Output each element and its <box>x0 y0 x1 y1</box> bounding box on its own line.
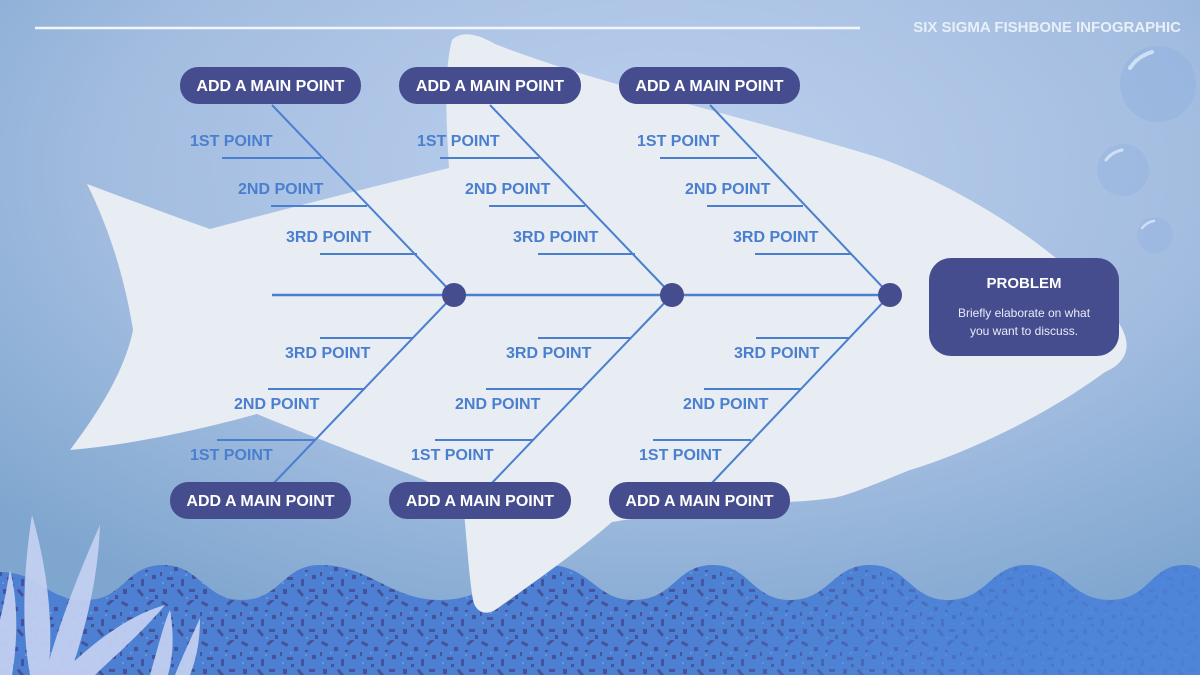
bone group 1 <box>217 105 454 485</box>
main point pills bottom <box>170 482 790 519</box>
sub-point labels: 1ST POINT <box>411 447 494 464</box>
main point pills bottom: ADD A MAIN POINT <box>186 493 335 510</box>
sub-point labels: 2ND POINT <box>455 396 541 413</box>
bubbles <box>1097 46 1196 253</box>
problem box: Briefly elaborate on what <box>958 306 1091 320</box>
sub-point labels: 1ST POINT <box>417 133 500 150</box>
problem box: PROBLEM <box>986 275 1062 292</box>
plant <box>0 515 200 675</box>
sub-point labels: 1ST POINT <box>190 447 273 464</box>
header line <box>35 27 860 29</box>
sub-point labels: 3RD POINT <box>733 229 819 246</box>
sub-point labels: 3RD POINT <box>506 345 592 362</box>
sub-point labels: 1ST POINT <box>190 133 273 150</box>
sub-point labels: 1ST POINT <box>637 133 720 150</box>
sub-point labels: 1ST POINT <box>639 447 722 464</box>
main point pills top: ADD A MAIN POINT <box>416 78 564 95</box>
sub-point labels: 2ND POINT <box>234 396 320 413</box>
main point pills top <box>180 67 800 104</box>
sub-point labels: 3RD POINT <box>286 229 372 246</box>
title: SIX SIGMA FISHBONE INFOGRAPHIC <box>913 19 1181 36</box>
main point pills top: ADD A MAIN POINT <box>196 78 345 95</box>
main point pills top: ADD A MAIN POINT <box>635 78 784 95</box>
bone group 3 <box>653 105 890 485</box>
wave <box>0 565 1200 675</box>
sub-point labels: 2ND POINT <box>683 396 769 413</box>
sub-point labels: 2ND POINT <box>238 181 324 198</box>
sub-point labels: 2ND POINT <box>465 181 551 198</box>
problem box: you want to discuss. <box>970 324 1078 338</box>
joints <box>442 283 902 307</box>
sub-point labels: 2ND POINT <box>685 181 771 198</box>
sub-point labels: 3RD POINT <box>285 345 371 362</box>
sub-point labels: 3RD POINT <box>513 229 599 246</box>
main point pills bottom: ADD A MAIN POINT <box>625 493 774 510</box>
sub-point labels: 3RD POINT <box>734 345 820 362</box>
main point pills bottom: ADD A MAIN POINT <box>406 493 554 510</box>
spine <box>272 294 890 296</box>
bone group 2 <box>435 105 672 485</box>
sub-point labels <box>190 133 820 464</box>
problem box <box>929 258 1119 356</box>
fish silhouette <box>70 34 1127 613</box>
